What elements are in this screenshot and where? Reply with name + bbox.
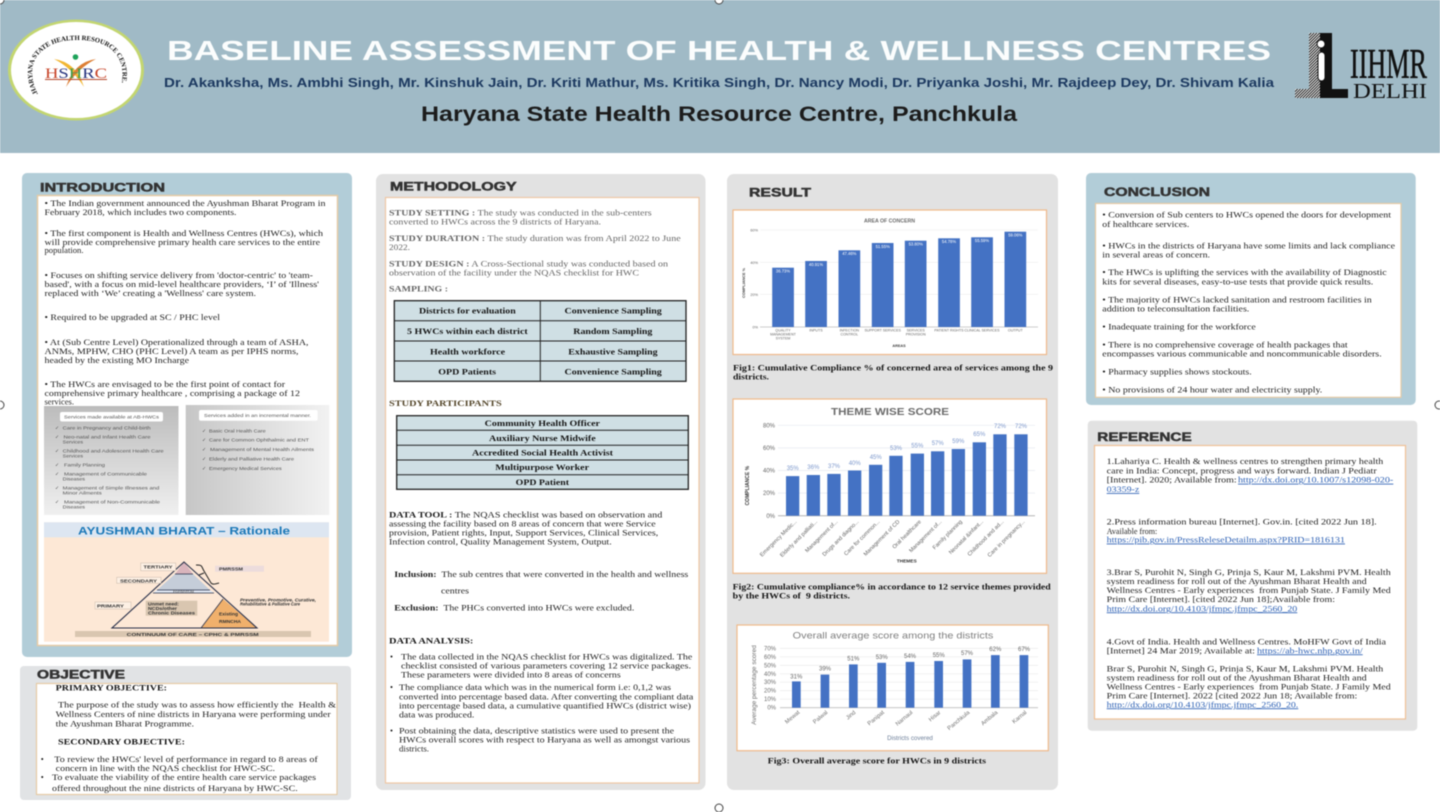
chart: theme wise score: Family planning	[932, 519, 964, 551]
logo: HSHRC	[8, 19, 144, 121]
introduction text box: replaced with ‘We’ creating a 'Wellness' care system.	[44, 288, 256, 298]
services added incrementally: ✓	[202, 428, 206, 434]
chart: area of concern: AREA OF CONCERN	[864, 218, 915, 224]
chart: theme wise score: 57%	[932, 441, 944, 447]
chart: overall average score: Palwal	[812, 710, 829, 726]
chart: overall average score: 55%	[933, 653, 945, 659]
ayushman bharat rationale diagram: RMNCHA	[219, 619, 242, 624]
introduction text box	[38, 196, 338, 646]
introduction text box: ANMs, MPHW, CHO (PHC Level) A team as per IPHS norms,	[44, 346, 298, 356]
chart: theme wise score: Care in pregnancy...	[987, 519, 1027, 559]
services made available: Care in Pregnancy and Child-birth	[63, 425, 151, 431]
chart: theme wise score: 20%	[763, 491, 776, 497]
chart: theme wise score: 55%	[911, 444, 924, 450]
ayushman bharat rationale diagram: Rehabilitative & Palliative Care	[240, 602, 300, 606]
chart: theme wise score: COMPLIANCE %	[745, 465, 751, 505]
data analysis: HWCs overall scores with respect to Haryana as well as amongst various	[399, 734, 690, 744]
chart: overall average score: 57%	[961, 651, 974, 657]
conclusion text box: • No provisions of 24 hour water and electricity supply.	[1102, 384, 1322, 394]
data analysis: districts.	[399, 744, 429, 754]
ayushman bharat rationale diagram: AYUSHMAN BHARAT – Rationale	[78, 526, 290, 538]
chart: area of concern: 20%	[750, 293, 759, 297]
chart: area of concern: PATIENT RIGHTS	[934, 328, 964, 332]
introduction text box: will provide comprehensive primary health care services to the entire	[44, 237, 320, 247]
heading: methodology: METHODOLOGY	[390, 180, 517, 194]
chart: overall average score: Mewat	[784, 710, 802, 726]
data analysis: These parameters were divided into 8 areas of concerns	[401, 670, 621, 680]
conclusion text box: • Pharmacy supplies shows stockouts.	[1102, 366, 1252, 376]
reference text box: Wellness Centres - Early experiences from Punjab State. J Family Med	[1107, 585, 1392, 595]
objective text box: To evaluate the viability of the entire health care service packages	[52, 772, 316, 782]
reference text box: [Internet]. 2020; Available from:	[1107, 475, 1237, 485]
chart: area of concern: CONTROL	[841, 332, 858, 336]
ayushman bharat rationale diagram: Preventive, Promotive, Curative,	[240, 598, 316, 602]
reference text box: http://dx.doi.org/10.1007/s12098-020-	[1238, 475, 1393, 485]
inclusion and exclusion: centres	[441, 586, 469, 596]
services added incrementally	[186, 405, 329, 515]
heading: objective: OBJECTIVE	[37, 668, 125, 682]
study participants heading: STUDY PARTICIPANTS	[389, 398, 502, 408]
chart: area of concern: PROVISION	[906, 332, 926, 336]
reference text box: http://dx.doi.org/10.4103/jfmpc.jfmpc_2560_20	[1107, 603, 1297, 613]
methodology text box	[386, 198, 699, 783]
data analysis: The compliance data which was in the numerical form i.e: 0,1,2 was	[399, 682, 671, 692]
sampling table: Districts for evaluation	[419, 306, 516, 316]
services added incrementally: Care for Common Ophthalmic and ENT	[209, 438, 309, 444]
reference text box: https://ab-hwc.nhp.gov.in/	[1257, 645, 1363, 655]
ayushman bharat rationale diagram: Chronic Diseases	[148, 610, 196, 616]
panel: result	[727, 174, 1058, 790]
logo: IIHMR Delhi	[1295, 33, 1427, 103]
ayushman bharat rationale diagram: TERTIARY	[144, 564, 172, 570]
chart: overall average score: Hisar	[928, 710, 942, 723]
chart: area of concern: SYSTEM	[776, 336, 790, 340]
chart: area of concern: AREAS	[892, 344, 906, 348]
data analysis: •	[390, 725, 393, 735]
chart: theme wise score: 72%	[1015, 424, 1028, 430]
chart: theme wise score: 65%	[973, 432, 986, 438]
chart: area of concern: 59.06%	[1008, 233, 1023, 238]
chart: theme wise score: Management of...	[908, 519, 944, 554]
chart: overall average score: 53%	[876, 655, 888, 661]
services made available: ✓	[55, 499, 59, 505]
services added incrementally: ✓	[202, 466, 206, 472]
caption: figure 2: Fig2: Cumulative compliance% in accordance to 12 service themes provided	[733, 582, 1051, 592]
chart: theme wise score: Neonatal &infant...	[948, 519, 985, 556]
logo: HSHRC: .HARYANA STATE HEALTH RESOURCE CENTRE.	[27, 34, 128, 95]
chart: overall average score: Narnaul	[895, 710, 914, 728]
conclusion text box: • HWCs in the districts of Haryana have some limits and lack compliance	[1102, 240, 1395, 250]
chart: theme wise score: Management of CD	[863, 519, 901, 558]
panel: introduction	[22, 173, 352, 657]
caption: figure 1	[733, 362, 1053, 381]
chart: theme wise score: 72%	[994, 424, 1007, 430]
introduction text box: • Required to be upgraded at SC / PHC level	[44, 312, 221, 322]
conclusion text box: • There is no comprehensive coverage of health packages that	[1102, 339, 1348, 349]
study setting, duration, design: STUDY DESIGN : A Cross-Sectional study was conducted based on	[389, 259, 669, 269]
reference text box: system readiness for roll out of the Ayushman Bharat Health and	[1107, 672, 1368, 682]
reference text box: care in India: Concept, progress and ways forward. Indian J Pediatr	[1107, 465, 1377, 475]
services made available: ✓	[55, 425, 59, 431]
chart: area of concern: COMPLIANCE %	[742, 267, 746, 298]
chart: theme wise score: 45%	[870, 455, 882, 461]
introduction text box: • The first component is Health and Wellness Centres (HWCs), which	[44, 228, 324, 238]
reference text box: https://pib.gov.in/PressReleseDetailm.aspx?PRID=1816131	[1107, 534, 1345, 544]
study setting, duration, design: STUDY DURATION : The study duration was from April 2022 to June	[389, 233, 681, 243]
chart: overall average score: 54%	[904, 654, 917, 660]
chart: overall average score: 10%	[764, 697, 777, 703]
services made available: Management of Simple Illnesses and	[63, 485, 160, 491]
chart: overall average score: 30%	[764, 680, 777, 686]
data analysis: •	[390, 651, 393, 661]
chart: area of concern: 55.59%	[975, 238, 989, 243]
services added incrementally: Elderly and Palliative Health Care	[209, 456, 294, 462]
services made available: Services made available at AB-HWCs	[64, 414, 160, 420]
ayushman bharat rationale diagram: PRIMARY	[97, 604, 124, 608]
chart: overall average score: Karnal	[1012, 710, 1028, 725]
reference text box: 3.Brar S, Purohit N, Singh G, Prinja S, Kaur M, Lakshmi PVM. Health	[1107, 567, 1392, 577]
reference text box: Available from:	[1107, 526, 1157, 536]
services made available: Services	[63, 454, 84, 460]
chart: area of concern: 40%	[750, 261, 759, 265]
ayushman bharat rationale diagram: Referral	[173, 589, 194, 595]
ayushman bharat rationale diagram	[44, 522, 329, 642]
services made available: ✓	[55, 462, 59, 468]
data analysis: DATA ANALYSIS:	[389, 635, 474, 645]
chart: overall average score: 40%	[764, 672, 777, 678]
chart: theme wise score	[733, 399, 1046, 573]
objective text box: the Ayushman Bharat Programme.	[56, 718, 194, 728]
chart: overall average score: Jind	[845, 710, 857, 721]
reference text box: Prim Care [Internet]. 2022 [cited 2022 Jun 18; Available from:	[1107, 690, 1357, 700]
institution: Haryana State Health Resource Centre, Panchkula	[421, 103, 1017, 126]
sampling table: 5 HWCs within each district	[407, 326, 528, 336]
panel: objective	[20, 666, 351, 800]
chart: area of concern: SUPPORT SERVICES	[865, 328, 901, 332]
chart: theme wise score: 80%	[763, 424, 776, 430]
conclusion text box: encompasses various communicable and noncommunicable disorders.	[1102, 349, 1382, 359]
chart: theme wise score: 40%	[849, 461, 861, 467]
data analysis: checklist consisted of various parameters covering 12 service packages.	[401, 661, 691, 671]
study setting, duration, design: observation of the facility under the NQAS checklist for HWC	[389, 267, 639, 277]
study setting, duration, design: STUDY SETTING : The study was conducted in the sub-centers	[389, 207, 652, 217]
chart: area of concern: OUTPUT	[1008, 328, 1023, 332]
ayushman bharat rationale diagram: Unmet need:	[148, 602, 180, 606]
services made available: ✓	[55, 435, 59, 441]
chart: theme wise score: 36%	[807, 465, 820, 471]
logo: IIHMR Delhi: DELHI	[1353, 79, 1427, 103]
objective text box: •	[41, 772, 44, 782]
chart: area of concern: SERVICES	[907, 328, 925, 332]
data tool: DATA TOOL : The NQAS checklist was based on observation and	[389, 509, 663, 519]
conclusion text box: kits for several diseases, easy-to-use tests that provide quick results.	[1102, 276, 1373, 286]
participants table: Community Health Officer	[485, 418, 600, 428]
chart: theme wise score: Emergency Medic...	[759, 519, 799, 558]
objective text box: offered throughout the nine districts of Haryana by HWC-SC.	[52, 783, 298, 793]
sampling table: Exhaustive Sampling	[568, 346, 658, 356]
chart: overall average score: 0%	[767, 706, 777, 712]
chart: overall average score: 70%	[764, 646, 777, 652]
chart: theme wise score: 40%	[763, 468, 776, 474]
chart: overall average score: Panchkula	[947, 709, 972, 732]
data analysis: converted into percentage based data. After converting the compliant data	[399, 691, 694, 701]
chart: area of concern: INPUTS	[809, 328, 823, 332]
introduction text box: based', with a focus on mid-level healthcare providers, ‘I’ of 'Illness'	[44, 279, 320, 289]
services made available: Diseases	[63, 504, 86, 510]
caption: figure 1: Fig1: Cumulative Compliance % of concerned area of services among the 9	[733, 362, 1053, 372]
chart: theme wise score: 0%	[766, 514, 776, 520]
authors: Dr. Akanksha, Ms. Ambhi Singh, Mr. Kinshuk Jain, Dr. Kriti Mathur, Ms. Kritika Singh, Dr. Nancy Modi, Dr. Priyanka Joshi, Mr. Rajdeep Dey, Dr. Shivam Kalia	[164, 76, 1275, 90]
conclusion text box: of healthcare services.	[1102, 219, 1189, 229]
sampling table: Convenience Sampling	[564, 366, 663, 376]
chart: theme wise score: 59%	[952, 439, 965, 445]
chart: area of concern: 60%	[750, 228, 759, 232]
services made available: Neo-natal and Infant Health Care	[64, 435, 151, 441]
data analysis: into percentage based data, a cumulative quantified HWCs (district wise)	[399, 700, 691, 710]
ayushman bharat rationale diagram: PMRSSM	[219, 566, 243, 572]
chart: overall average score: 62%	[989, 647, 1002, 653]
reference text box: 4.Govt of India. Health and Wellness Centres. MoHFW Govt of India	[1107, 636, 1386, 646]
conclusion text box: addition to teleconsultation facilities.	[1102, 303, 1249, 313]
services added incrementally: Emergency Medical Services	[209, 466, 282, 472]
chart: overall average score: Districts covered	[887, 735, 933, 742]
conclusion text box: in several areas of concern.	[1102, 249, 1210, 259]
chart: area of concern: INFECTION	[840, 328, 859, 332]
data analysis: The data collected in the NQAS checklist for HWCs was digitalized. The	[401, 651, 693, 661]
chart: overall average score: 39%	[819, 666, 832, 672]
inclusion and exclusion: Exclusion: The PHCs converted into HWCs were excluded.	[394, 603, 634, 613]
services made available: Childhood and Adolescent Health Care	[63, 449, 164, 455]
panel: reference	[1088, 421, 1417, 731]
participants table: Auxiliary Nurse Midwife	[489, 433, 596, 443]
sampling table: OPD Patients	[438, 366, 497, 376]
inclusion and exclusion	[394, 569, 688, 613]
ayushman bharat rationale diagram: Existing	[219, 612, 238, 616]
services made available: Family Planning	[64, 462, 105, 468]
services added incrementally: ✓	[202, 456, 206, 462]
chart: area of concern: 54.78%	[942, 239, 956, 244]
services made available: ✓	[55, 485, 59, 491]
chart: theme wise score: 35%	[787, 466, 799, 472]
introduction text box: headed by the existing MO Incharge	[44, 355, 189, 365]
introduction text box: February 2018, which includes two components.	[44, 207, 236, 217]
sampling table: Random Sampling	[573, 326, 653, 336]
chart: overall average score: 50%	[764, 663, 777, 669]
data tool: assessing the facility based on 8 areas of concern that were Service	[389, 519, 656, 529]
objective text box: •	[41, 754, 44, 764]
objective text box: To review the HWCs' level of performance in regard to 8 areas of	[54, 754, 318, 764]
services made available: Management of Communicable	[64, 471, 147, 477]
chart: theme wise score: Childhood and ad...	[967, 519, 1006, 558]
conclusion text box: • Inadequate training for the workforce	[1102, 321, 1256, 331]
objective text box	[36, 683, 337, 794]
services added incrementally: ✓	[202, 438, 206, 444]
panel: conclusion	[1086, 173, 1416, 405]
data analysis: data was produced.	[399, 709, 474, 719]
objective text box: concern in line with the NQAS checklist for HWC-SC.	[56, 763, 275, 773]
objective text box: SECONDARY OBJECTIVE:	[58, 737, 185, 747]
conclusion text box: • Conversion of Sub centers to HWCs opened the doors for development	[1102, 210, 1392, 220]
chart: area of concern: 0%	[752, 326, 759, 330]
reference text box: Prim Care [Internet]. [cited 2022 Jun 18];Available from:	[1107, 594, 1335, 604]
participants table	[397, 416, 688, 489]
chart: area of concern: QUALITY	[775, 328, 791, 332]
introduction text box: • Focuses on shifting service delivery from 'doctor-centric' to 'team-	[44, 270, 313, 280]
ayushman bharat rationale diagram: SECONDARY	[120, 578, 157, 584]
caption: figure 1: districts.	[733, 371, 769, 381]
heading: result: RESULT	[749, 186, 812, 200]
chart: area of concern: CLINICAL SERVICES	[964, 328, 1000, 332]
chart: overall average score: Ambala	[980, 709, 1000, 727]
reference text box	[1094, 446, 1406, 719]
services made available: ✓	[55, 449, 59, 455]
main title: BASELINE ASSESSMENT OF HEALTH & WELLNESS CENTRES	[167, 35, 1271, 66]
chart: theme wise score: 53%	[890, 446, 903, 452]
chart: overall average score: Overall average score among the districts	[793, 630, 994, 641]
chart: theme wise score: THEMES	[897, 559, 917, 565]
heading: conclusion: CONCLUSION	[1104, 185, 1210, 199]
services added incrementally: Management of Mental Health Ailments	[210, 447, 315, 453]
chart: theme wise score: Drugs and diagno...	[822, 519, 861, 558]
participants table: Multipurpose Worker	[495, 462, 589, 472]
caption: figure 2: by the HWCs of 9 districts.	[733, 590, 850, 600]
data tool: Infection control, Quality Management System, Output.	[389, 537, 612, 547]
chart: overall average score: 60%	[764, 655, 777, 661]
data analysis: •	[390, 682, 393, 692]
chart: theme wise score: Care for common...	[843, 519, 882, 557]
chart: area of concern: 36.73%	[776, 268, 790, 274]
chart: overall average score: Panipat	[867, 710, 886, 727]
chart: area of concern: 40.91%	[809, 262, 823, 267]
services added incrementally: Basic Oral Health Care	[209, 428, 266, 434]
chart: overall average score: 31%	[790, 674, 803, 680]
services made available: Minor Ailments	[63, 490, 102, 496]
inclusion and exclusion: Inclusion: The sub centres that were converted in the health and wellness	[394, 569, 688, 579]
reference text box: 03359-z	[1107, 484, 1140, 494]
chart: overall average score	[737, 625, 1048, 751]
sampling table	[394, 301, 686, 381]
conclusion text box: • The HWCs is uplifting the services with the availability of Diagnostic	[1102, 267, 1387, 277]
objective text box: PRIMARY OBJECTIVE:	[56, 683, 167, 693]
reference text box: Wellness Centres - Early experiences from Punjab State. J Family Med	[1107, 681, 1392, 691]
objective text box: Wellness Centers of nine districts in Haryana were performing under	[56, 709, 331, 719]
data analysis	[389, 635, 694, 754]
ayushman bharat rationale diagram: CONTINUUM OF CARE – CPHC & PMRSSM	[127, 632, 259, 637]
chart: area of concern: 51.55%	[876, 244, 890, 249]
chart: area of concern: MANAGEMENT	[770, 332, 797, 336]
reference text box: http://dx.doi.org/10.4103/jfmpc.jfmpc_2560_20.	[1107, 699, 1298, 709]
study setting, duration, design: 2022.	[389, 242, 410, 252]
chart: overall average score: Average percentage scored	[751, 645, 758, 725]
chart: overall average score: 51%	[847, 656, 860, 662]
study setting, duration, design: converted to HWCs across the 9 districts of Haryana.	[389, 216, 601, 226]
chart: area of concern	[733, 210, 1046, 354]
services made available: Management of Non-Communicable	[64, 499, 160, 505]
chart: theme wise score: 37%	[828, 464, 841, 470]
participants table: OPD Patient	[516, 477, 569, 487]
study setting, duration, design	[389, 207, 681, 294]
panel: methodology	[376, 174, 706, 790]
introduction text box: • At (Sub Centre Level) Operationalized through a team of ASHA,	[44, 337, 308, 347]
reference text box: 2.Press information bureau [Internet]. Gov.in. [cited 2022 Jun 18].	[1107, 517, 1377, 527]
study setting, duration, design: SAMPLING :	[389, 284, 448, 294]
reference text box: system readiness for roll out of the Ayushman Bharat Health and	[1107, 576, 1368, 586]
logo: HSHRC: HSHRC	[45, 66, 107, 82]
reference text box: 1.Lahariya C. Health & wellness centres to strengthen primary health	[1107, 456, 1384, 466]
header banner	[0, 0, 1440, 154]
chart: theme wise score: Oral healthcare	[892, 519, 923, 550]
sampling table: Convenience Sampling	[564, 306, 663, 316]
introduction text box: • The Indian government announced the Ayushman Bharat Program in	[44, 198, 326, 208]
heading: reference: REFERENCE	[1097, 430, 1192, 444]
conclusion text box: • The majority of HWCs lacked sanitation and restroom facilities in	[1102, 294, 1373, 304]
introduction text box: comprehensive primary healthcare , comprising a package of 12	[44, 388, 300, 398]
heading: introduction: INTRODUCTION	[40, 180, 165, 194]
objective text box: The purpose of the study was to assess how efficiently the Health &	[58, 700, 336, 710]
services added incrementally: ✓	[202, 447, 206, 453]
services made available: Diseases	[63, 476, 86, 482]
data tool	[389, 509, 663, 547]
services made available	[44, 406, 178, 515]
services made available: Services	[63, 440, 84, 446]
introduction text box: population.	[44, 245, 84, 255]
data analysis: Post obtaining the data, descriptive statistics were used to present the	[399, 725, 674, 735]
introduction text box: services.	[44, 396, 74, 406]
data tool: provision, Patient rights, Input, Support Services, Clinical Services,	[389, 528, 658, 538]
conclusion text box	[1096, 204, 1401, 397]
sampling table: Health workforce	[430, 346, 505, 356]
chart: theme wise score: 60%	[763, 446, 776, 452]
chart: overall average score: 20%	[764, 689, 777, 695]
reference text box: Brar S, Purohit N, Singh G, Prinja S, Kaur M, Lakshmi PVM. Health	[1107, 663, 1384, 673]
chart: theme wise score: THEME WISE SCORE	[831, 407, 949, 418]
caption: figure 2	[733, 582, 1051, 600]
chart: area of concern: 53.80%	[909, 242, 923, 247]
introduction text box: • The HWCs are envisaged to be the first point of contact for	[44, 379, 285, 389]
ayushman bharat rationale diagram: NCDs/other	[148, 606, 177, 611]
chart: overall average score: 67%	[1018, 647, 1031, 653]
services added incrementally: Services added in an incremental manner.	[204, 413, 311, 419]
caption: figure 3: Fig3: Overall average score for HWCs in 9 districts	[768, 755, 987, 765]
chart: theme wise score: Management of...	[804, 519, 840, 554]
participants table: Accredited Social Health Activist	[472, 448, 613, 458]
services made available: ✓	[55, 471, 59, 477]
reference text box: [Internet] 24 Mar 2019; Available at:	[1107, 645, 1255, 655]
chart: area of concern: 47.46%	[842, 251, 857, 256]
chart: theme wise score: Elderly and palliati...	[779, 519, 819, 559]
